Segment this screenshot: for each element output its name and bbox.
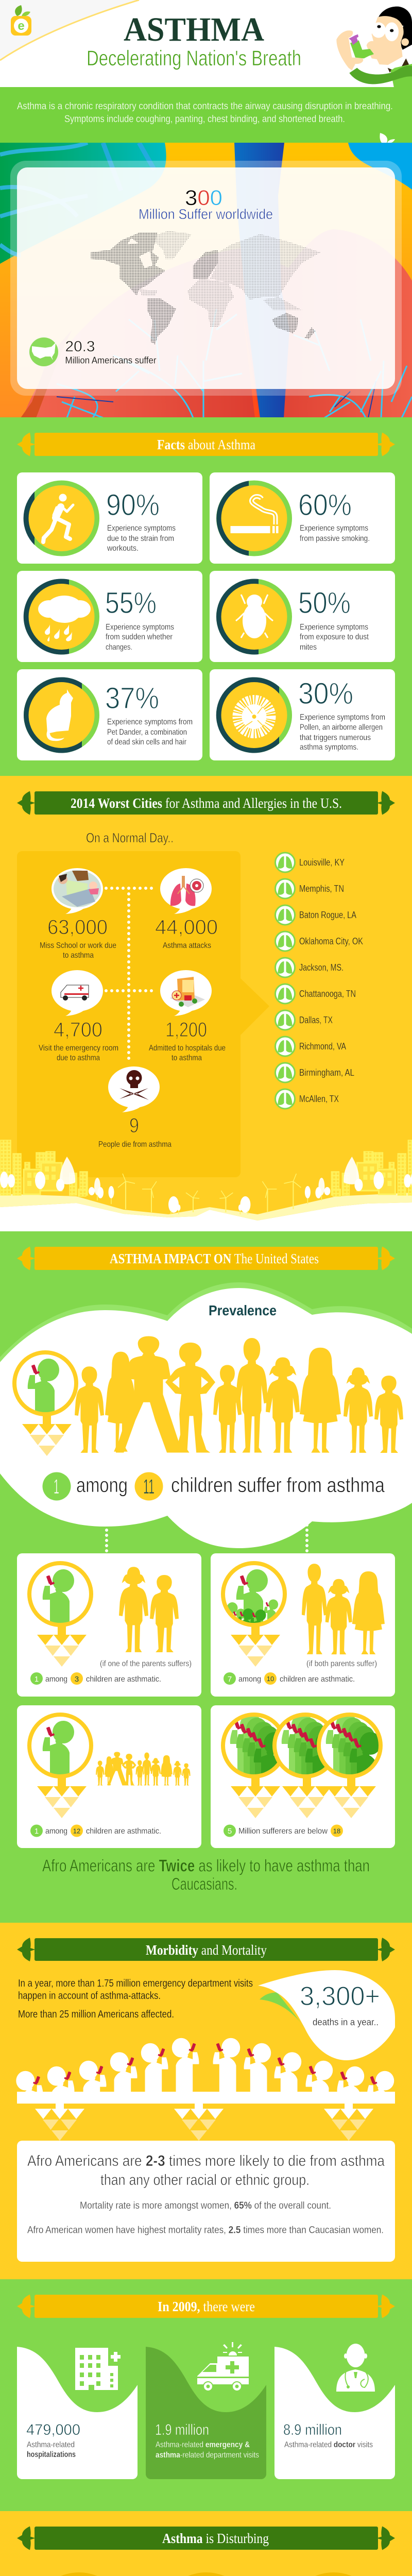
card: million sufferers: Million sufferers are below (238, 1827, 328, 1836)
callout: deaths: deaths in a year.. (313, 2017, 379, 2027)
card: no parents: among (45, 1827, 67, 1836)
fact card: passive smoking 60%: Experience symptoms (300, 524, 368, 533)
stat: admitted to hospitals (149, 970, 226, 1062)
list: worst cities (275, 853, 363, 1109)
card: both parents (211, 1553, 395, 1697)
icon: ambulance (197, 2342, 249, 2391)
fact card: weather 55%: 55% (105, 586, 157, 620)
card: hospitalizations: hospitalizations (27, 2450, 76, 2459)
heading: asthma impact (17, 1247, 395, 1270)
stat: deaths (98, 1066, 171, 1149)
subtitle: Decelerating Nation's Breath (87, 46, 301, 70)
panel: facts about asthma (0, 417, 412, 776)
heading: disturbing (17, 2527, 395, 2550)
list: worst cities: McAllen, TX (299, 1094, 339, 1104)
card: million sufferers: 18 (333, 1827, 340, 1835)
stat: 300 million: 300 (185, 185, 222, 210)
stat: asthma attacks (155, 868, 218, 950)
card: one parent: children are asthmatic. (86, 1675, 161, 1684)
list: worst cities: Jackson, MS. (299, 962, 344, 973)
icon: rain cloud (38, 596, 91, 641)
intro text: Symptoms include coughing, panting, chest binding, and shortened breath. (64, 114, 345, 125)
card: hospitalizations: 479,000 (26, 2421, 80, 2438)
fact card: pollen 30% (210, 669, 395, 760)
statement: twice as likely: Afro Americans are Twice as likely to have asthma than (42, 1856, 370, 1875)
children silhouettes (96, 1752, 191, 1786)
icon: cigarette (231, 497, 278, 533)
skyline illustration (0, 1140, 412, 1221)
fact card: workouts 90%: Experience symptoms (107, 524, 176, 533)
fact card: pet dander 37%: of dead skin cells and hair (107, 738, 187, 747)
icon: USA badge (29, 337, 58, 366)
card: one parent: 3 (75, 1675, 79, 1684)
white panel: disparities: Afro American women have highest mortality rates, 2.5 times more than Caucasian women. (27, 2225, 384, 2236)
list: worst cities: Richmond, VA (299, 1041, 346, 1052)
children silhouettes (302, 1564, 385, 1654)
statement: twice as likely (42, 1856, 370, 1893)
statement: 1 among 11: 1 (54, 1476, 59, 1498)
stat: admitted to hospitals: 1,200 (165, 1019, 207, 1041)
card: no parents: 12 (73, 1827, 80, 1835)
fact card: passive smoking 60% (210, 472, 395, 564)
icon: hospital (75, 2348, 121, 2390)
fact card: pollen 30%: 30% (298, 677, 353, 710)
card: both parents: (if both parents suffer) (306, 1659, 377, 1668)
fact card: pollen 30%: Experience symptoms from (300, 713, 385, 722)
statement: 1 among 11: 11 (143, 1476, 154, 1498)
heading: in 2009 (17, 2295, 395, 2318)
subheading: on a normal day: On a Normal Day.. (86, 830, 174, 845)
dotted world map (91, 231, 320, 344)
arrows down (35, 2104, 373, 2141)
panel: worst cities (0, 776, 412, 1221)
title: ASTHMA (124, 11, 264, 48)
card: one parent: 1 (35, 1675, 39, 1684)
fact card: pet dander 37%: Experience symptoms from (107, 718, 193, 726)
panel: in 2009 (0, 2279, 412, 2511)
label: million Americans suffer: Million Americans suffer (65, 355, 157, 366)
card: million sufferers: 5 (228, 1827, 232, 1836)
translucent frame (10, 161, 402, 396)
icon: doctor (336, 2344, 375, 2392)
header swoosh (0, 0, 139, 60)
card: million sufferers (211, 1705, 395, 1848)
icon: ePharmacies logo (11, 5, 31, 36)
heading: facts about asthma: Facts about Asthma (157, 437, 255, 452)
panel: world statistics (0, 143, 412, 418)
callout: deaths: 3,300+ (300, 1981, 380, 2011)
fact card: weather 55%: changes. (106, 643, 132, 652)
card: physical activity (271, 2575, 395, 2576)
card: both parents: 10 (267, 1675, 274, 1683)
stat: miss school: Miss School or work due (40, 941, 116, 950)
card: both parents: children are asthmatic. (280, 1675, 355, 1684)
heading: facts about asthma (17, 433, 395, 456)
card: one parent (17, 1553, 201, 1697)
fact card: weather 55% (17, 571, 202, 662)
fact card: dust mites 50%: 50% (298, 586, 351, 620)
prevalence cloud (0, 1282, 412, 1548)
panel: morbidity and mortality (0, 1923, 412, 2279)
icon: mite (236, 595, 273, 638)
heading: morbidity (17, 1938, 395, 1961)
card: hospitalizations (17, 2347, 138, 2479)
card: no parents: 1 (35, 1827, 39, 1836)
fact card: pollen 30%: Pollen, an airborne allergen (300, 723, 383, 732)
stat: miss school (40, 868, 116, 960)
stat: deaths: 9 (129, 1114, 139, 1137)
text: emergency visits: happen in account of asthma-attacks. (18, 1990, 161, 2002)
card: doctor visits: Asthma-related doctor visits (284, 2441, 373, 2449)
fact card: workouts 90% (17, 472, 202, 564)
white panel: disparities: Afro Americans are 2-3 times more likely to die from asthma (27, 2153, 385, 2170)
card: emergency (146, 2342, 266, 2479)
fact card: pet dander 37%: Pet Dander, a combination (107, 728, 187, 737)
intro text (17, 101, 393, 125)
heading: morbidity: Morbidity and Mortality (146, 1942, 267, 1958)
fact card: passive smoking 60%: from passive smoking. (300, 534, 370, 543)
card: no parents: children are asthmatic. (86, 1827, 161, 1836)
card: both parents: among (238, 1675, 261, 1684)
card: doctor visits: 8.9 million (283, 2421, 342, 2438)
stat: emergency room (39, 970, 118, 1062)
icon: child with inhaler (14, 1352, 76, 1456)
callout: deaths (258, 1970, 395, 2060)
card: missing school (17, 2575, 141, 2576)
fact card: weather 55%: from sudden whether (106, 633, 173, 641)
stat: emergency room: 4,700 (54, 1019, 102, 1041)
statement: twice as likely: Caucasians. (171, 1874, 237, 1893)
list: worst cities: Dallas, TX (299, 1015, 333, 1025)
dotted connectors (106, 888, 157, 1064)
fact card: dust mites 50%: from exposure to dust (300, 633, 369, 641)
heading: prevalence: Prevalence (209, 1302, 277, 1318)
stat: admitted to hospitals: to asthma (171, 1054, 202, 1062)
icon: pollen burst (238, 700, 271, 733)
heading: worst cities (17, 791, 395, 815)
colourful background art (0, 143, 412, 418)
stat: asthma attacks: 44,000 (155, 916, 218, 939)
fact card: workouts 90%: 90% (106, 488, 160, 522)
icon: runner (43, 494, 73, 542)
stat: emergency room: Visit the emergency room (39, 1044, 118, 1053)
fact card: pollen 30%: that triggers numerous (300, 734, 371, 742)
stat: 20.3: 20.3 (65, 338, 95, 355)
stat: asthma attacks: Asthma attacks (163, 941, 211, 950)
text: emergency visits: In a year, more than 1.75 million emergency department visits (18, 1978, 253, 1989)
card: both parents: 7 (228, 1675, 232, 1684)
white panel: disparities (17, 2141, 395, 2262)
text: emergency visits: More than 25 million Americans affected. (18, 2009, 174, 2020)
card: emergency: asthma-related department visits (156, 2451, 259, 2460)
list: worst cities: Louisville, KY (299, 857, 345, 868)
stat: miss school: 63,000 (47, 916, 108, 939)
list: worst cities: Chattanooga, TN (299, 989, 356, 999)
heading: disturbing: Asthma is Disturbing (162, 2531, 269, 2546)
heading: in 2009: In 2009, there were (158, 2299, 255, 2314)
fact card: dust mites 50%: Experience symptoms (300, 623, 368, 632)
list: worst cities: Memphis, TN (299, 884, 344, 894)
stat: emergency room: due to asthma (57, 1054, 100, 1062)
list: worst cities: Birmingham, AL (299, 1067, 354, 1078)
illustration: man using inhaler (336, 7, 412, 88)
white panel (17, 167, 395, 389)
stat: deaths: People die from asthma (98, 1140, 171, 1149)
statement: 1 among 11: among (76, 1474, 128, 1497)
stat: miss school: to asthma (63, 951, 94, 960)
icon: white leaves (380, 133, 395, 143)
heading: asthma impact: ASTHMA IMPACT ON The United States (110, 1251, 319, 1266)
card: emergency: 1.9 million (155, 2421, 209, 2438)
card: emergency: Asthma-related emergency & (156, 2441, 250, 2449)
panel: asthma is disturbing (0, 2511, 412, 2576)
statement: 1 among 11 (42, 1472, 385, 1500)
fact card: dust mites 50%: mites (300, 643, 317, 652)
daily panel (17, 851, 269, 1177)
fact card: pollen 30%: asthma symptoms. (300, 743, 358, 752)
dotted connectors (107, 1525, 307, 1700)
card: one parent: among (45, 1675, 67, 1684)
children silhouettes (75, 1336, 403, 1453)
row of children with inhalers (16, 2038, 395, 2104)
fact card: dust mites 50% (210, 571, 395, 662)
white panel: disparities: than any other racial or ethnic group. (100, 2172, 310, 2189)
stat: admitted to hospitals: Admitted to hospitals due (149, 1044, 226, 1053)
icon: cat (46, 689, 73, 741)
children silhouettes (119, 1567, 179, 1652)
fact card: workouts 90%: workouts. (107, 544, 139, 553)
card: hospitalizations: Asthma-related (27, 2441, 75, 2449)
list: worst cities: Oklahoma City, OK (299, 936, 363, 946)
fact card: pet dander 37%: 37% (105, 682, 159, 715)
white panel: disparities: Mortality rate is more amongst women, 65% of the overall count. (80, 2200, 331, 2211)
fact card: weather 55%: Experience symptoms (106, 623, 174, 632)
panel: asthma impact (0, 1231, 412, 1923)
fact card: workouts 90%: due to the strain from (107, 534, 174, 543)
card: one parent: (if one of the parents suffers) (100, 1659, 192, 1668)
heading: worst cities: 2014 Worst Cities for Asthma and Allergies in the U.S. (71, 795, 342, 811)
text: emergency visits (18, 1978, 253, 2020)
label: million suffer worldwide: Million Suffer worldwide (139, 206, 273, 222)
fact card: passive smoking 60%: 60% (298, 488, 352, 522)
card: no parents (17, 1705, 201, 1848)
intro band (0, 87, 412, 143)
fact card: pet dander 37% (17, 669, 202, 760)
list: worst cities: Baton Rogue, LA (299, 910, 356, 920)
card: missing work (144, 2575, 268, 2576)
card: doctor visits (274, 2344, 395, 2479)
